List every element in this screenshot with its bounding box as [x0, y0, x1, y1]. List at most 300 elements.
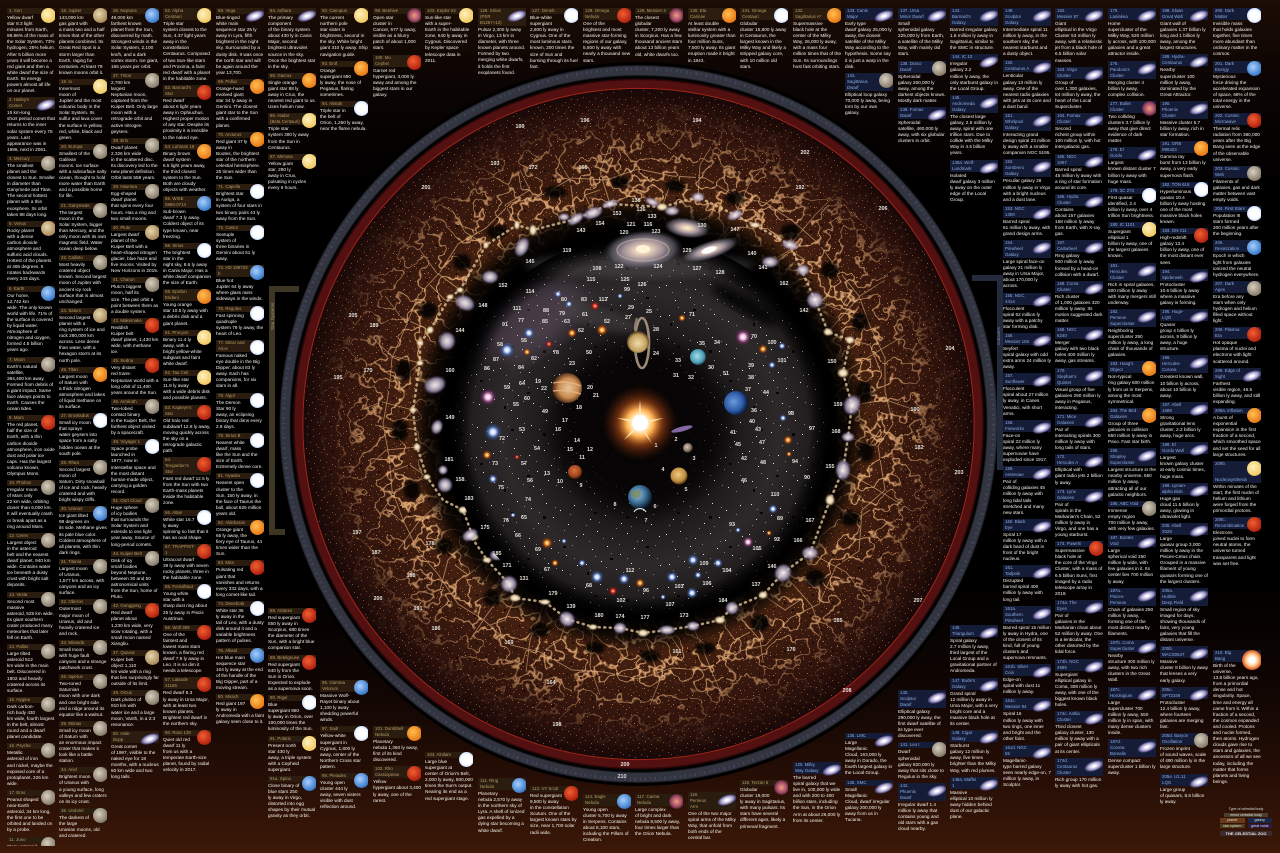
number labels: 185: [492, 551, 502, 557]
entry: Betelgeuse: Red supergiant 640 ly from the Sun in Orion. Expected to explode as a supernova soon.: [268, 662, 313, 691]
entry: Bellatrix: [268, 113, 316, 151]
panel: column 2 gas giants: [59, 8, 107, 838]
entry: Alkaid: Hot blue main sequence star 104 ly away at the end of the handle of the Big Dipper, part of a moving stream.: [216, 654, 263, 690]
entry: M51: 151. Whirlpool Galaxy: [1005, 113, 1023, 130]
number labels: 168: [578, 165, 588, 171]
number labels: 122: [614, 264, 624, 270]
entry: Sun: Yellow dwarf star 8.3 light minutes from Earth, 99.86% of the mass of the Solar System. 73% hydrogen, 25% helium. After 5 billion more years it will become a red giant and then a white dwarf the size of Earth. Its energy powers almost all life on our planet.: [7, 15, 55, 93]
number labels: 78: [553, 350, 559, 356]
entry: Andromeda: [950, 95, 998, 156]
panel: column 11 bottom: [530, 786, 578, 846]
panel: column 24 bottom, Big Bang: [1213, 650, 1261, 805]
number labels: 10: [557, 479, 563, 485]
entry: Perseus: [1055, 489, 1103, 538]
entry: Spica: 126. Sirius (PSR B1257+12): [480, 8, 502, 25]
number labels: 58: [497, 342, 503, 348]
entry: Oort: Huge sphere of icy bodies that surrounds the Solar System and extends to one light year away. Source of long-period comets.: [111, 505, 155, 547]
entry: Aldebaran: Orange giant 65 ly away, the fiery eye of Taurus, 44 times wider than the Sun.: [216, 527, 262, 556]
entry: The Bird: 184. The Bird Galaxies: [1110, 408, 1136, 419]
number labels: 41: [730, 430, 736, 436]
entry: Barnard Galaxy: Barred irregular galaxy 1.6 million ly away in Sagittarius, similar to the SMC in structure.: [950, 27, 997, 50]
entry: Laniakea: 199. Lyman-alpha Blob: [1162, 483, 1186, 494]
entry: Oberon: [59, 599, 107, 636]
entry: Luhman: 54. Luhman 16: [165, 144, 194, 149]
entry: Abell: Strong gravitational lens cluster, 2.2 billion ly away, huge arcs.: [1160, 415, 1201, 438]
number labels: 38: [748, 375, 754, 381]
entry: Spica: Pulsating red giant that vanishes and returns every 332 days, with a long comet-like tail.: [216, 567, 263, 597]
entry: Mice: 171. Mice Galaxies: [1057, 414, 1076, 425]
entry: Sextans: [898, 783, 946, 832]
entry: 3C 273: 179. 3C 273: [1110, 188, 1134, 193]
panel: column 17 top: [845, 8, 893, 120]
entry: Sgr A: Supermassive black hole at the center of the Milky Way, 26,000 ly away, with a mass four million times that of the Sun. Its surroundings host fast orbiting stars.: [793, 21, 841, 69]
entry: Virgo Cluster: 163. Virgo Cluster: [1057, 67, 1077, 78]
entry: Barnard Galaxy: 143. Barnard's Galaxy: [952, 8, 971, 25]
entry: Bullet: [1108, 101, 1156, 144]
entry: Halley: 15 km-long short period comet that returns to the inner solar system every 75 years. Last appearance was in 1986, next in 2061.: [7, 110, 55, 152]
entry: Sadr: Yellow-white supergiant in Cygnus, 1,800 ly away, center of the Northern Cross star pattern.: [320, 733, 361, 769]
entry: ABC: 186. ABC Void: [1110, 501, 1138, 506]
entry: Stephan: Visual group of five galaxies 290 million ly away in Pegasus, interacting.: [1055, 387, 1101, 410]
entry: WD: 79. Sirius B: [218, 433, 240, 438]
entry: Mirach: Red giant 197 ly away in Andromeda with a faint galaxy seen close to it.: [216, 701, 264, 724]
number labels: 154: [596, 221, 604, 227]
entry: Sadr: [320, 726, 368, 770]
entry: Procyon: [163, 330, 211, 367]
entry: Gacrux: Single orange giant star 88 ly away in Crux, the nearest red giant to us. Uses helium now.: [268, 80, 316, 109]
entry: NGC 253: Edge-on spiral with dust 11 million ly away.: [1003, 677, 1040, 694]
entry: Kepler: 103. Kepler-22: [427, 8, 456, 13]
number labels: 107: [666, 602, 674, 608]
entry: Epsilon Eridani: Young orange star 10.5 ly away with a debris disk and a giant planet.: [163, 302, 208, 326]
galaxies: bright galaxies along the ring: [409, 192, 864, 637]
entry: Umbriel: The darkest of the large Uranian moons, old and cratered.: [59, 815, 100, 838]
entry: Eyes: Pair of galaxies in the Markarian chain about 52 million ly away. One is a lenticular, the other distorted by the tidal force.: [1055, 613, 1103, 654]
entry: Sculptor Galaxy: 149. Sculptor Galaxy: [1005, 8, 1021, 25]
entry: Alnitak: Triple star in the belt of Orion, 1,260 ly away, near the flame nebula.: [320, 108, 367, 131]
entry: Coma Super: 187b. Coma Supercluster: [1110, 640, 1135, 651]
number labels: 6: [654, 504, 656, 510]
number labels: 116: [644, 222, 652, 228]
entry: Phoenix: 190. Phoenix Cluster: [1162, 101, 1178, 118]
number labels: 126: [638, 282, 646, 288]
entry: Phoenix: Massive cluster 5.7 billion ly away, rich in star formation.: [1160, 120, 1204, 137]
entry: M104: [1003, 159, 1051, 203]
number labels: 5: [684, 487, 688, 493]
number labels: 189: [370, 323, 378, 329]
number labels: 136: [636, 207, 646, 213]
number labels: 208: [842, 688, 852, 694]
entry: Io: Innermost moon of Jupiter and the most volcanic body in the Solar System. Its sulfur and lava cover the surface in yellow, red, white, black and green.: [59, 86, 103, 140]
number labels: 84: [518, 365, 524, 371]
number labels: 142: [800, 308, 808, 314]
entry: Cosmic: [1108, 535, 1156, 585]
entry: Teegarden: 64. Teegarden's Star: [165, 457, 189, 474]
number labels: 195: [334, 375, 342, 381]
entry: Spica: Pulsar 2,300 ly away in Virgo, 13 km in diameter, with three known planets around. Formed by two merging white dwarfs, it holds the first exoplanets found.: [478, 27, 525, 75]
entry: NGC 6822: [950, 160, 998, 203]
entry: MACS: [1160, 646, 1208, 684]
number labels: 43: [755, 427, 761, 433]
entry: Quark: Hot opaque plasma of nuclei and electrons with light scattered around.: [1213, 340, 1256, 364]
entry: Uranus: Ice giant tilted 98 degrees on its side. Methane gives its pale blue color. Coldest atmosphere of all planets, with thin dark rings.: [59, 513, 107, 555]
entry: Ganymede: The largest moon in the Solar System, bigger than Mercury, and the only moon with its own magnetic field. Water ocean deep below.: [59, 210, 106, 251]
entry: Dark energy: Mysterious force driving the accelerated expansion of space, 68% of the total energy in the universe.: [1213, 74, 1260, 109]
entry: PSR: 81. Hyades: [218, 473, 240, 478]
number labels: 14: [574, 438, 580, 444]
entry: Ring: 100. Mu Cephei: [375, 55, 391, 66]
entry: Shapley Super: Largest structure in the nearby universe, 650 million ly away, attracting all of our galactic neighbors.: [1108, 467, 1156, 497]
entry: M64: [1003, 519, 1051, 562]
entry: M101: Large spiral face-on galaxy 21 million ly away in Ursa Major, about 170,000 ly across.: [1003, 259, 1044, 288]
entry: Betelgeuse: 89. Betelgeuse: [270, 655, 299, 660]
entry: Great Wall: Large quasar group 3,000 million ly away in the Pisces-Cetus chain. Grouped in a massive filament of young quasars forming one of the largest clusters.: [1160, 536, 1208, 584]
number labels: 55: [513, 402, 519, 408]
entry: Antlia: [1055, 711, 1103, 755]
entry: Big Bang: Birth of the universe, 13.8 billion years ago, from a primordial dense and hot singularity. Space, time and energy all came from it. Within a fraction of a second, the cosmos expanded and cooled. Protons and nuclei formed, then atoms. Hydrogen clouds gave rise to stars and galaxies, the ancestors of all we see today, including the matter that forms planets and living beings.: [1213, 663, 1261, 784]
entry: Bellatrix: 86. Hadar (Beta Centauri): [270, 113, 300, 124]
entry: Sunflower: 157. Sunflower: [1005, 373, 1025, 384]
panel: inner disc with nearby stars: [448, 236, 832, 620]
entry: HCB: 196. Hercules-Corona: [1162, 355, 1181, 372]
entry: Tadpole: [1003, 565, 1051, 603]
number labels: 153: [612, 211, 622, 217]
entry: Sedna: Very distant red trans-Neptunian world with a long orbit of 11,400 years around the Sun.: [111, 365, 158, 395]
entry: Milky Way: The barred spiral galaxy that we live in, 100,000 ly wide and with 200 to 400 billion stars, including the Sun, in the Orion Arm at about 26,000 ly from its center.: [793, 775, 840, 823]
entry: M106: 156. Messier 106: [1005, 333, 1029, 344]
number labels: 148: [478, 303, 488, 309]
number labels: 37: [745, 387, 751, 393]
number labels: 52: [604, 319, 610, 325]
entry: Dark energy: [1213, 61, 1261, 110]
entry: GRB: [1160, 141, 1208, 179]
number labels: 188: [406, 573, 416, 579]
entry: Leo I: Dwarf spheroidal galaxy 820,000 ly away that sits close to Regulus in the sky.: [898, 749, 944, 779]
entry: LQG: 205e. U1.11 LQG: [1162, 774, 1186, 784]
number labels: 152: [498, 283, 508, 289]
entry: Psyche: 16. Psyche: [9, 743, 31, 748]
entry: Sculptor: [898, 690, 946, 739]
number labels: 39: [748, 363, 754, 369]
panel: column 24 top: [1213, 8, 1261, 646]
entry: Carina Nebula: [635, 794, 683, 837]
number labels: 187: [372, 550, 380, 556]
entry: Hercules: Elliptical with giant radio jets 2 billion ly away.: [1055, 467, 1103, 484]
number labels: 32: [688, 375, 694, 381]
entry: Wolf 359: 56. Wolf 359: [165, 625, 190, 630]
entry: Southern Pinwheel: [1003, 606, 1051, 661]
number labels: 149: [446, 415, 454, 421]
entry: Wolf: Massive Wolf-Rayet binary about 1,100 ly away shedding powerful winds.: [320, 693, 359, 722]
panel: column 9 top: [425, 8, 473, 96]
number labels: 145: [526, 259, 534, 265]
entry: Callisto: Most heavily cratered object known. Second largest moon of Jupiter with ancient icy rock surface that is almost unchanged.: [59, 262, 106, 304]
entry: Dumbbell: Planetary nebula 1,360 ly away, first of its kind discovered.: [373, 739, 418, 762]
number labels: 127: [692, 266, 702, 272]
entry: M64: 160. Black Eye: [1005, 519, 1026, 530]
entry: Centaurus A: Lenticular galaxy 13 million ly away. One of the nearest radio galaxies with jets at its core and a dust band.: [1003, 73, 1051, 109]
logo: The Celestial Zoo: THE CELESTIAL ZOO: [1225, 831, 1267, 836]
entry: Eta Carinae: 130. Eta Carinae: [690, 8, 706, 19]
number labels: 175: [480, 525, 490, 531]
number labels: 16: [555, 427, 561, 433]
entry: Rhea: Second largest moon of Saturn. Dirty snowball of ice and rock, heavily cratered and with bright wispy cliffs.: [59, 467, 107, 502]
number labels: 85: [542, 319, 548, 325]
number labels: 158: [456, 477, 464, 483]
entry: NGC 6240: 169. NGC 6240: [1057, 327, 1077, 338]
entry: Eye of Sauron: Supermassive black hole at the core of the Virgo Cluster, with a mass of 6.5 billion Suns, first imaged by a radio telescope array in 2019.: [1055, 548, 1102, 596]
number labels: 186: [432, 626, 440, 632]
entry: Altair: White star 16.7 ly away spinning so fast that it has an oval shape.: [163, 517, 208, 540]
entry: El Gordo: Largest known distant cluster 7 billion ly away with huge mass.: [1108, 160, 1156, 184]
entry: IC 1101: 180. IC 1101: [1110, 222, 1135, 227]
entry: SPT: [1160, 687, 1208, 730]
bracket: galaxies section: [972, 278, 1000, 470]
entry: NGC 55: [1003, 745, 1051, 788]
entry: Altair: 66. Altair: [165, 510, 182, 515]
entry: Hoag: Non-typical ring galaxy 600 million ly from us in Serpens, among the most symmetrical.: [1108, 374, 1154, 404]
entry: Huge LQG: [1160, 309, 1208, 352]
entry: Mercury: The smallest planet and the closest to Sun. Smaller in diameter than Ganymede and Titan. The second hottest planet with a thin exosphere. Its orbit takes 88 days long.: [7, 163, 55, 217]
number labels: 119: [563, 248, 571, 254]
panel: column 10 bottom: [478, 778, 526, 846]
panel: column 8 bottom: [373, 726, 421, 846]
entry: Ring: Garnet red hypergiant, 3,000 ly away and among the biggest stars in our galaxy.: [373, 68, 417, 97]
number labels: 100: [768, 340, 776, 346]
entry: Spiderweb: [1160, 269, 1208, 306]
entry: Europa: 20. Europa: [61, 144, 82, 149]
legend: type of celestial body: planet: [1227, 818, 1237, 822]
entry: Sgr A: 132. Sagittarius A*: [795, 8, 821, 19]
number labels: [334, 118, 964, 780]
entry: Lalande: Red dwarf 8.3 ly away in Ursa Major, with at least two known planets. Brightest red dwarf in the northern sky.: [163, 690, 209, 726]
legend: type of celestial body: great voids: [1251, 824, 1269, 828]
entry: Hercules: 172. Hercules A: [1057, 454, 1078, 465]
number labels: 35: [699, 341, 705, 347]
entry: NGC 1097: [1055, 154, 1103, 191]
entry: Fomalhaut: 65. Fomalhaut: [165, 584, 193, 589]
entry: NGC 6240: Merger galaxy with two black holes 400 million ly away, gas streams.: [1055, 340, 1099, 363]
star: Sun: [602, 385, 678, 461]
entry: Sagittarius: 134. Sagittarius Dwarf: [847, 73, 868, 90]
filaments: drawn branches of the cosmic web: [360, 140, 915, 705]
entry: Iapetus: Two-toned Saturnian moon with one dark and one bright side and a ridge around its equator like a walnut.: [59, 681, 104, 717]
number labels: 72: [499, 436, 505, 442]
entry: Omega Centauri: 131. Omega Centauri: [742, 8, 766, 19]
entry: Barnard: 53. Barnard's Star: [165, 85, 191, 96]
entry: Spiderweb: Protocluster 10.6 billion ly away where a massive galaxy is forming.: [1160, 282, 1199, 305]
entry: Eye of Sauron: 174. Powehi: [1057, 541, 1081, 546]
entry: M63: [1003, 698, 1051, 742]
number labels: 210: [618, 774, 626, 780]
entry: Dumbbell: [373, 726, 421, 763]
entry: Wolf: 95. Gamma Velorum: [322, 680, 345, 691]
entry: M82: 148. Cigar Galaxy: [952, 730, 972, 741]
entry: NGC 1097: Barred spiral 45 million ly away with a ring of star formation around its core.: [1055, 166, 1102, 190]
entry: Teegarden: Faint red dwarf 12.5 ly from the Sun with two Earth-mass planets inside the habitable zone.: [163, 476, 209, 505]
entry: M101: 154. Pinwheel Galaxy: [1005, 240, 1023, 257]
number labels: 124: [654, 264, 662, 270]
entry: Quaoar: Kuiper belt object 1,110 km wide with a ring that lies surprisingly far outside of its limit.: [111, 657, 159, 686]
entry: Titania: 31. Titania: [61, 559, 81, 564]
entry: Callisto: 22. Callisto: [61, 255, 83, 260]
entry: Procyon: 61. Procyon: [165, 330, 188, 335]
planet: Neptune: [724, 391, 748, 415]
entry: Triangulum: [950, 625, 998, 675]
entry: M33: 158. Fireworks: [1005, 420, 1024, 431]
entry: Polaris: The current northern pole star sister in brightness, second in the sky. White bright giant 310 ly away. Ship navigation guide.: [320, 15, 368, 57]
entry: Regulus: 75. Regulus: [218, 306, 241, 311]
entry: Draco: 138. Draco Dwarf: [900, 61, 921, 72]
entry: Mice: [1055, 414, 1103, 451]
entry: Carina Nebula: 117. Carina Nebula: [637, 794, 659, 805]
entry: Kuiper: Disk of icy small bodies beyond Neptune, between 30 and 50 astronomical units from the Sun, home of Pluto.: [111, 558, 157, 599]
entry: Kepler: Sun-like star with a super-Earth in the habitable zone, 640 ly away in Cygnus. Discovered by Kepler space telescope data in 2011.: [425, 15, 469, 63]
field: speckled galaxy texture: [304, 90, 972, 758]
entry: Oort: 51. Oort Cloud: [113, 498, 142, 503]
number labels: 73: [492, 461, 498, 467]
entry: Earth: Our home, 12,742 km wide. The only known world with life. 71% of the surface is covered by liquid water. Atmosphere of nitrogen and oxygen, formed 4.5 billion years ago.: [7, 293, 53, 352]
number labels: 191: [414, 606, 422, 612]
panel: column 3 outer solar system: [111, 8, 159, 779]
entry: Tadpole: 161. Tadpole: [1005, 565, 1020, 576]
entry: Messier 4: 129. Messier 4: [637, 8, 666, 13]
number labels: 89: [777, 516, 783, 522]
entry: Inflation: A burst of exponential expansion in the first fraction of a second, which smoothed space and set the seed for all large structures.: [1213, 415, 1261, 457]
entry: Vesta: Second most massive asteroid, 525 km wide. Its giant southern crater produced many meteorites that later fell on Earth.: [7, 598, 54, 640]
number labels: 76: [503, 518, 509, 524]
number labels: 86: [484, 366, 490, 372]
legend: type of celestial body: star system: [1223, 824, 1241, 828]
entry: Tau Ceti: Sun-like star 11.9 ly away with a wide debris disk and possible planets.: [163, 377, 210, 400]
number labels: 182: [914, 445, 924, 451]
number labels: 198: [552, 722, 562, 728]
number labels: 66: [515, 533, 521, 539]
number labels: 67: [544, 567, 550, 573]
number labels: 50: [586, 350, 592, 356]
voids between filaments near the galaxies ring: [392, 176, 874, 662]
number labels: 171: [502, 563, 512, 569]
number labels: 57: [521, 461, 527, 467]
entry: SPT: 205c. SPT2349: [1162, 687, 1180, 698]
entry: Ceres: Largest object in the asteroid belt and the nearest dwarf planet, 940 km wide. Contains water ice beneath a dusty crust with bright salt deposits.: [7, 540, 51, 587]
number labels: 30: [708, 365, 714, 371]
entry: Arcturus: Red giant 37 ly away in Bootes, the brightest star of the northern celestial hemisphere. 25 times wider than the Sun.: [216, 139, 260, 180]
entry: Maffei: [950, 777, 998, 820]
entry: Centaurus: 174d. Centaurus Cluster: [1057, 758, 1077, 775]
entry: Pallas: 14. Pallas: [9, 644, 28, 649]
entry: Adhara: The primary component of the binary system about 430 ly in Canis Major, second brightest ultraviolet source in the sky. Once the brightest star in the sky.: [268, 15, 315, 69]
entry: NGC 1097: 165. NGC 1097: [1057, 154, 1077, 164]
entry: Huge LQG: Quasar group 4 billion ly across, 9 billion ly away, a huge structure.: [1160, 322, 1197, 351]
entry: LQG: Large group of quasars, 8.5 billion ly away.: [1160, 786, 1204, 804]
entry: 3C 273: First quasar identified, 2.4 billion ly away, over 4 trillion Sun brightness.: [1108, 195, 1154, 218]
entry: Enceladus: Small icy moon that sprays water geysers into space from a salty hidden ocean at the south pole.: [59, 420, 100, 456]
number labels: 209: [620, 762, 630, 768]
entry: Milky Way: 120. Milky Way Galaxy: [795, 762, 819, 773]
legend: type of celestial body: galaxy: [1255, 818, 1265, 822]
entry: Wolf 359: One of the faintest and lowest mass stars known, a flaring red dwarf 7.9 ly away in Leo. It is so dim it needs a telescope.: [163, 632, 204, 673]
entry: IC 10: 144. IC 10: [952, 54, 972, 59]
number labels: 167: [806, 518, 814, 524]
entry: HDF: Small region of sky imaged for days, showing thousands of faint, very young galaxies that fill the distant universe.: [1160, 607, 1205, 642]
entry: Antennae: 159. Antennae: [1005, 466, 1024, 477]
entry: Sculptor Galaxy: [1003, 8, 1051, 57]
entry: Eyes: 174a. The Eyes: [1057, 600, 1077, 611]
panel: column 15 top: [740, 8, 788, 80]
entry: Dumbbell: 101. Dumbbell Nebula: [375, 726, 403, 737]
entry: Horologium: [1108, 687, 1156, 736]
entry: Hydra: 166. Hydra Cluster: [1057, 194, 1078, 205]
entry: Pluto: Largest dwarf planet of the Kuiper Belt with a heart-shaped nitrogen glacier, blue haze and five moons. Visited by New Horizons in 2015.: [111, 232, 158, 273]
entry: Luhman: Binary brown dwarf system 6.5 light years away, the third closest system to the Sun. Both are cloudy objects with weather.: [163, 151, 207, 192]
entry: NGC 55: 161d. NGC 55: [1005, 745, 1027, 756]
entry: M104: Peculiar galaxy 28 million ly away in Virgo with a bright nucleus and a dust lane.: [1003, 178, 1050, 202]
number labels: 138: [632, 198, 640, 204]
entry: Enceladus: 27. Enceladus: [61, 413, 89, 418]
number labels: 21: [593, 393, 599, 399]
number labels: 144: [456, 328, 464, 334]
entry: Rhea: 28. Rhea: [61, 460, 79, 465]
entry: NGC 253: 161b. Silver Coin: [1005, 664, 1028, 675]
ring: beaded chain of nearby galaxy clusters: [413, 197, 852, 633]
number labels: 110: [771, 492, 779, 498]
panel: column 19 bottom: [950, 625, 998, 846]
number labels: 11: [579, 455, 585, 461]
entry: Pisces: 187a. Pisces-Perseus: [1110, 588, 1126, 605]
panel: column 10 top: [478, 8, 526, 80]
entry: Bullet: 177. Bullet Cluster: [1110, 101, 1131, 112]
entry: Edge: 209. Edge of Sight: [1215, 368, 1240, 379]
panel: column 13 bottom: [635, 794, 683, 846]
entry: Antares: 88. Antares: [270, 608, 292, 613]
void: black gap around the Local Group: [410, 196, 866, 652]
field: fade towards the outer edge: [304, 89, 974, 759]
entry: Epsilon Eridani: [163, 289, 211, 327]
entry: Aldhibah: [373, 766, 421, 804]
entry: Fornax Cluster: 164. Fornax Cluster: [1057, 113, 1080, 124]
entry: Bellatrix: Triple star system 390 ly away from the Sun in Centaurus.: [268, 126, 309, 150]
entry: NGC 1300: 153. NGC 1300: [1005, 206, 1025, 217]
entry: Arrokoth: Two-lobed contact binary in the Kuiper Belt, the farthest object visited by a spacecraft.: [111, 406, 156, 435]
entry: Rigel: 90. Rigel: [270, 695, 287, 700]
entry: Corona: Dense compact supercluster 1 billion ly away.: [1108, 758, 1155, 775]
entry: Gonggong: 42. Gonggong: [113, 603, 141, 608]
number labels: 54: [534, 446, 540, 452]
entry: Perseus Arm: 118. Perseus Arm: [690, 792, 706, 809]
entry: UY Scuti: Red supergiant 9,500 ly away in the constellation Scutum. One of the largest known stars by size, near 1,700 solar radii wide.: [530, 793, 577, 835]
entry: Ceres: 12. Ceres: [9, 533, 28, 538]
number labels: 77: [518, 318, 524, 324]
entry: Miranda: Small moon with huge fault canyons and a strange patchwork crust.: [59, 647, 106, 670]
number labels: 168: [832, 429, 840, 435]
planet: Venus: [670, 468, 688, 484]
entry: Horizon: 203. Cosmic Web: [1215, 166, 1239, 177]
galaxy: Andromeda: [679, 232, 741, 268]
number labels: 147: [730, 227, 740, 233]
number labels: 17: [562, 418, 568, 424]
number labels: 160: [446, 368, 454, 374]
entry: M63: Spiral 16 million ly away with two rings, one inner and bright and the other faint.: [1003, 711, 1044, 741]
entry: Cosmic: Large spherical void 250 million ly wide, with few galaxies in it. Its center lies 700 million ly away.: [1108, 548, 1153, 584]
entry: NGC 1300: Barred spiral 61 million ly away, with grand design arms.: [1003, 219, 1050, 236]
panel: column 7 top: [320, 8, 368, 174]
number labels: 164: [546, 680, 556, 686]
entry: Big Bang: 210. Big Bang: [1215, 650, 1231, 661]
number labels: 97: [809, 426, 815, 432]
panel: column 11 top: [530, 8, 578, 70]
entry: Spica: 83. Mira: [218, 560, 234, 565]
